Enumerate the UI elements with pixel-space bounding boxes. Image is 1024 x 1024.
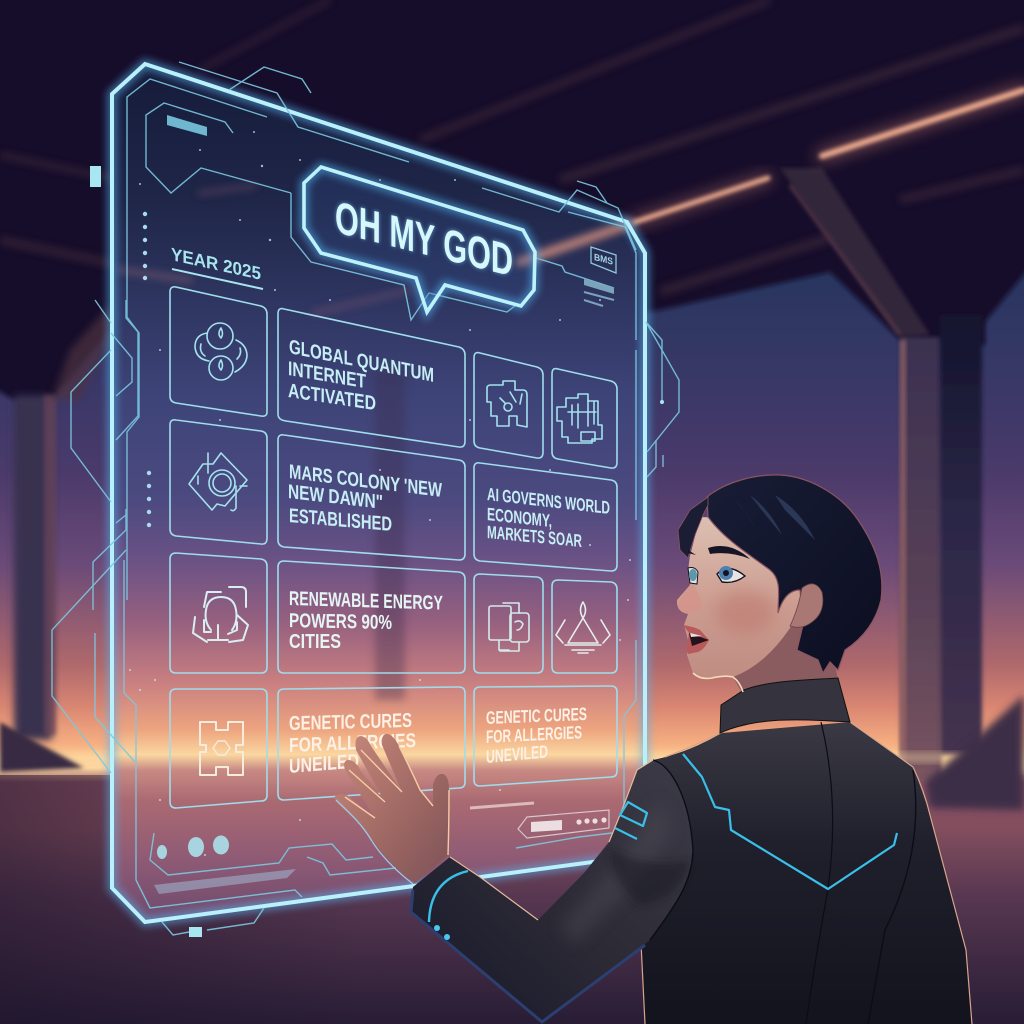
text: global quantum internet: INTERNET (288, 358, 367, 393)
hair (707, 475, 882, 673)
text: global quantum internet (288, 336, 434, 415)
icon: droplets cluster (195, 323, 247, 380)
text: global quantum internet: GLOBAL QUANTUM (289, 336, 434, 387)
card: icon row 3b (474, 574, 543, 673)
heading: year: YEAR 2025 (171, 244, 261, 284)
icon: network puzzle (487, 381, 527, 427)
card: icon row 3c (552, 580, 617, 673)
card: renewable energy (278, 561, 465, 673)
text: genetic cures right: GENETIC CURES (486, 704, 587, 728)
text: AI governs (487, 484, 610, 551)
text: renewable energy: RENEWABLE ENERGY (289, 588, 443, 615)
sparkles (129, 131, 631, 856)
bottom status dots (157, 836, 229, 859)
sleeve seam and rim (650, 760, 693, 940)
text: mars colony: NEW DAWN" (288, 481, 383, 514)
card: icon row 3 (170, 553, 267, 673)
nose (678, 582, 702, 613)
hair highlights (735, 495, 815, 540)
text: renewable energy: POWERS 90% (289, 610, 392, 634)
text: genetic cures left (289, 710, 416, 778)
card: icon row 2 (170, 420, 267, 544)
card: global quantum (278, 309, 465, 447)
card text (288, 336, 610, 778)
speech bubble: OH MY GOD (304, 167, 535, 312)
eye left (688, 568, 698, 584)
circuit traces (52, 62, 679, 935)
text: genetic cures right: FOR ALLERGIES (486, 722, 582, 747)
panel: holographic screen (52, 20, 679, 937)
mouth (683, 625, 709, 654)
card icons (189, 323, 610, 775)
header bar (167, 115, 207, 136)
text: genetic cures right (486, 704, 587, 767)
card: genetic cures (278, 687, 465, 800)
blush (715, 590, 775, 634)
icon: omega shield (193, 587, 248, 642)
text: AI governs: AI GOVERNS WORLD (487, 484, 610, 518)
card: AI governs (474, 463, 617, 571)
sleeve (411, 760, 693, 1022)
icon: mars base (189, 453, 247, 511)
text: renewable energy (289, 588, 443, 653)
card: genetic cures 2 (474, 686, 617, 786)
panel frame glow (112, 64, 645, 922)
badge: BMS (584, 247, 616, 306)
icon: devices (489, 603, 529, 651)
streaks seen through the glass (120, 20, 630, 313)
ear (790, 584, 823, 627)
eye right (717, 566, 745, 582)
text: mars colony: ESTABLISHED (289, 505, 392, 536)
indicator dots (143, 212, 151, 527)
text: genetic cures left: UNEILED (289, 750, 359, 778)
shadow column seen through the glass (375, 370, 405, 700)
face (677, 517, 805, 678)
speech bubble: OH MY GOD: OH MY GOD (335, 192, 513, 286)
corner markers (90, 166, 664, 937)
card: icon row 1c (552, 369, 617, 468)
jacket collar (720, 678, 850, 733)
bottom bar (154, 869, 296, 894)
jacket rim light (641, 722, 972, 1024)
cards grid (170, 287, 617, 808)
neck (733, 620, 838, 698)
person: woman in dark jacket (335, 475, 972, 1024)
text: genetic cures left: FOR ALLERGIES (289, 730, 416, 757)
back seam (806, 722, 833, 1024)
eyebrow (688, 546, 750, 559)
icon: rocket triangle (556, 602, 610, 653)
icon: chip cross (200, 722, 243, 775)
slider and capsule control (470, 803, 609, 838)
text: mars colony (288, 461, 442, 536)
shoulder shadow (610, 850, 690, 905)
jaw rim light (693, 673, 743, 692)
icon: machinery (557, 394, 602, 443)
card: icon row 1 (170, 287, 267, 416)
text: genetic cures right: UNEVILED (486, 741, 548, 767)
cyan jacket lines (429, 754, 897, 922)
torso (641, 722, 972, 1024)
text: global quantum internet: ACTIVATED (288, 380, 376, 415)
text: AI governs: ECONOMY, (487, 504, 552, 531)
hair wisp over forehead (678, 497, 708, 558)
badge: BMS: BMS (594, 252, 614, 268)
hand on the screen (335, 734, 449, 884)
panel frame (112, 64, 645, 922)
card: mars colony (278, 435, 465, 560)
text: genetic cures left: GENETIC CURES (289, 710, 412, 735)
right arm seam (868, 770, 916, 1024)
speech bubble: OH MY GOD: OH MY GOD (335, 192, 513, 286)
text: renewable energy: CITIES (289, 631, 341, 653)
text: AI governs: MARKETS SOAR (487, 522, 582, 551)
card: icon row 1b (474, 353, 543, 458)
card: icon row 4 (170, 689, 267, 808)
sleeve highlight (560, 800, 672, 945)
text: mars colony: MARS COLONY 'NEW (289, 461, 442, 502)
